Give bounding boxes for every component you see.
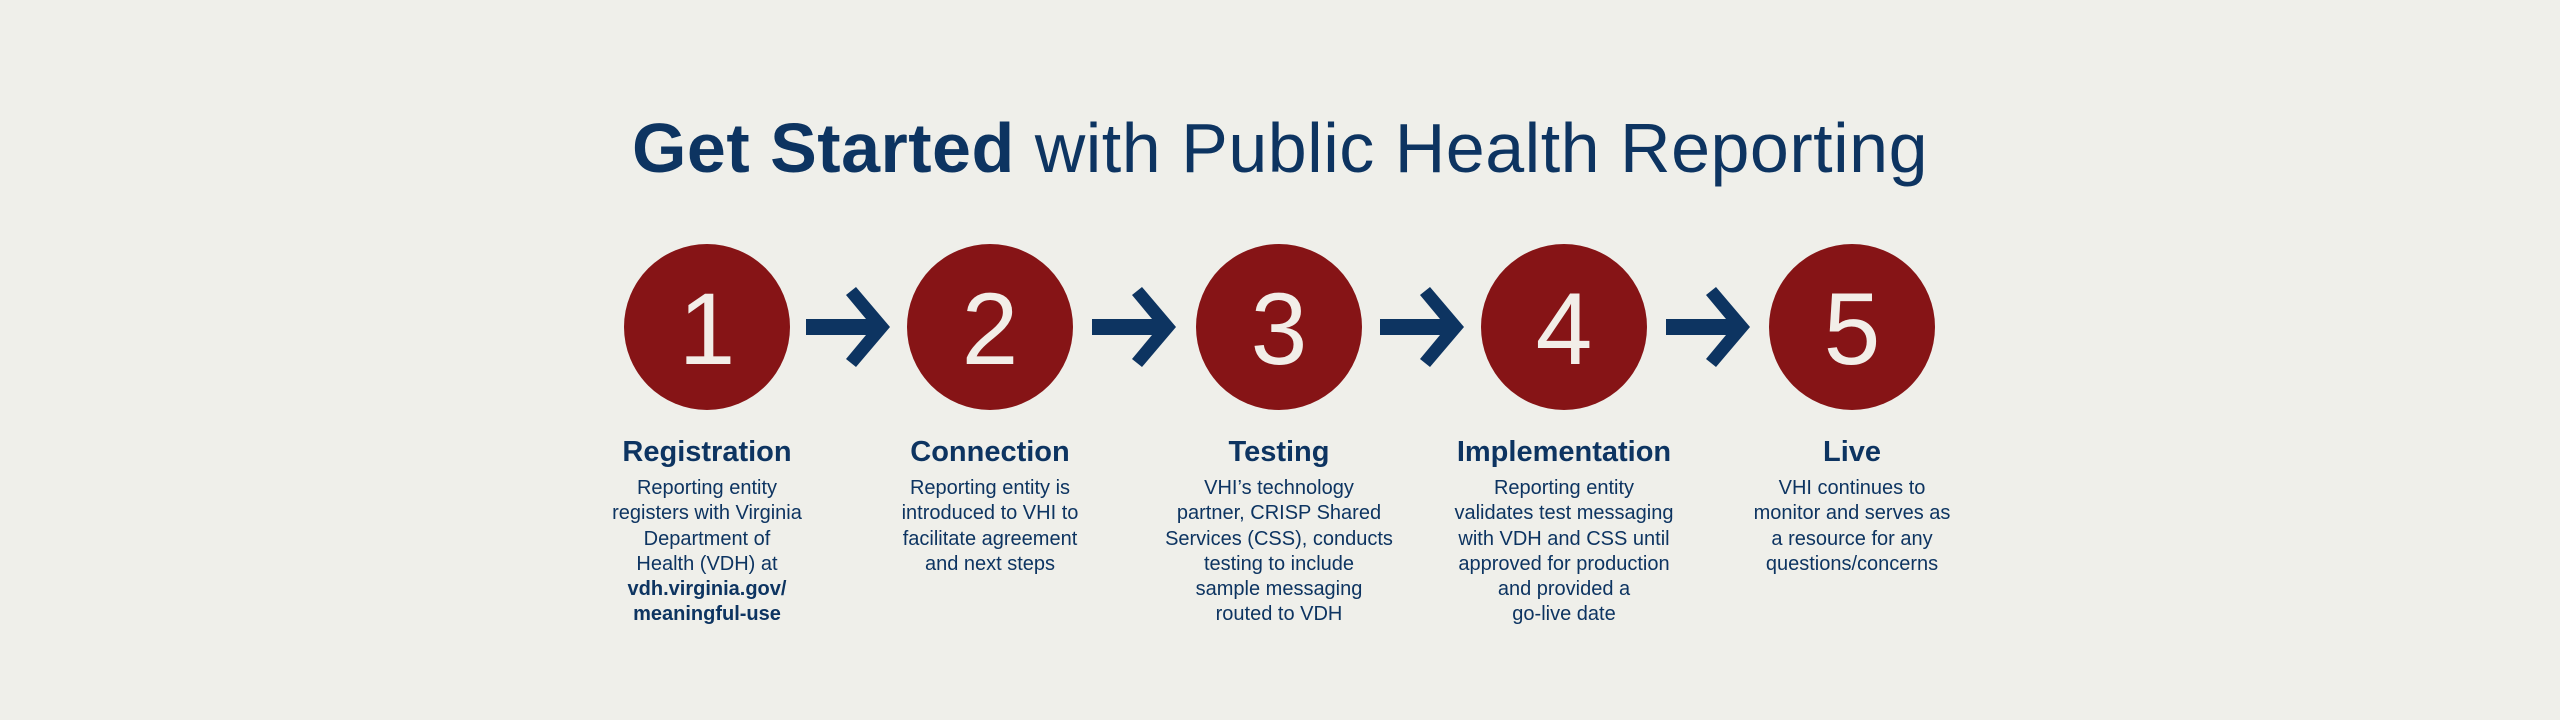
step 3 text: partner, CRISP Shared [1177, 502, 1381, 524]
step 1 text: Reporting entity [637, 477, 777, 499]
circle 3 [1196, 244, 1362, 410]
circle 2 [907, 244, 1073, 410]
step 5 text: monitor and serves as [1754, 502, 1950, 524]
step 2 text: introduced to VHI to [902, 502, 1078, 524]
circle 5 [1769, 244, 1935, 410]
circle 1 [624, 244, 790, 410]
title: Get Started with Public Health Reporting [632, 109, 1928, 187]
step 1 text [612, 436, 802, 625]
step 3 text: VHI’s technology [1204, 477, 1354, 499]
arrow 2 [1092, 287, 1176, 367]
step 4 text: Reporting entity [1494, 477, 1634, 499]
step 5 text: questions/concerns [1766, 553, 1938, 575]
step 2 text: facilitate agreement [903, 528, 1077, 550]
step 4 text: approved for production [1458, 553, 1670, 575]
circle 3: 3 [1251, 272, 1307, 386]
step 2 text: Connection [910, 436, 1070, 468]
circle 4: 4 [1536, 272, 1592, 386]
step 4 text [1454, 436, 1674, 625]
step 4 text: go-live date [1512, 603, 1616, 625]
step 5 text [1754, 436, 1950, 575]
step 3 text: Services (CSS), conducts [1165, 528, 1393, 550]
step 3 text: testing to include [1204, 553, 1354, 575]
step 3 text: sample messaging [1196, 578, 1362, 600]
circle 1: 1 [679, 272, 735, 386]
step 3 text [1165, 436, 1393, 625]
step 1 text: Registration [622, 436, 792, 468]
step 1 text: registers with Virginia [612, 502, 802, 524]
step 1 text: Department of [644, 528, 770, 550]
arrow 1 [806, 287, 890, 367]
step 5 text: a resource for any [1771, 528, 1933, 550]
arrow 4 [1666, 287, 1750, 367]
arrow 3 [1380, 287, 1464, 367]
step 2 text: and next steps [925, 553, 1055, 575]
step 4 text: with VDH and CSS until [1458, 528, 1670, 550]
circle 4 [1481, 244, 1647, 410]
step 2 text [902, 436, 1078, 575]
step 1 text: Health (VDH) at [636, 553, 778, 575]
step 5 text: VHI continues to [1779, 477, 1925, 499]
step 4 text: and provided a [1498, 578, 1630, 600]
step 4 text: validates test messaging [1454, 502, 1674, 524]
step 3 text: routed to VDH [1216, 603, 1342, 625]
step 4 text: Implementation [1457, 436, 1671, 468]
step 2 text: Reporting entity is [910, 477, 1070, 499]
step 3 text: Testing [1229, 436, 1329, 468]
step 1 text: vdh.virginia.gov/ [628, 578, 786, 600]
circle 5: 5 [1824, 272, 1880, 386]
step 1 text: meaningful-use [633, 603, 781, 625]
step 5 text: Live [1823, 436, 1881, 468]
circle 2: 2 [962, 272, 1018, 386]
